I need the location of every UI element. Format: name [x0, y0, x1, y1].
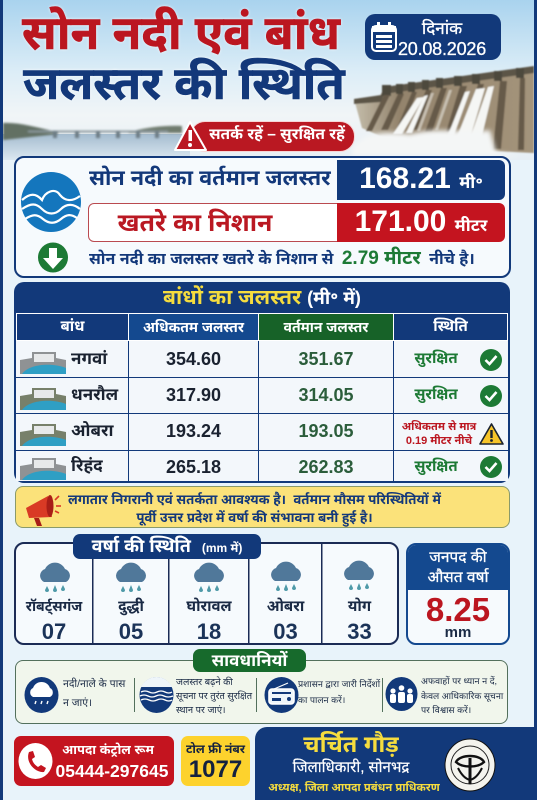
panel: river level [14, 156, 511, 278]
table header: बांध [60, 318, 85, 335]
row: Rihand [20, 456, 502, 480]
officer role: अध्यक्ष, जिला आपदा प्रबंधन प्राधिकरण [268, 782, 440, 794]
table header: अधिकतम जलस्तर [143, 319, 244, 335]
icon: warning [174, 121, 207, 151]
dam name: धनरौल [71, 385, 118, 404]
precaution text [421, 674, 503, 718]
emblem [444, 738, 496, 792]
max level: 354.60 [166, 349, 221, 369]
icon: water [139, 677, 174, 713]
icon: rain cloud [271, 562, 301, 591]
danger label: खतरे का निशान [118, 209, 272, 237]
dam name: रिहंद [71, 456, 103, 475]
rain value: 33 [347, 619, 372, 644]
toll free label: टोल फ्री नंबर [186, 742, 245, 756]
precaution text [176, 675, 252, 717]
rain value: 03 [273, 619, 298, 644]
rain value: 05 [119, 619, 143, 644]
icon: dam [20, 388, 66, 410]
rain value: 18 [197, 619, 221, 644]
precaution text: न जाएं। [63, 697, 92, 709]
icon: calendar [371, 22, 397, 52]
rainfall heading: वर्षा की स्थिति (mm में) [92, 536, 242, 556]
panel: dam levels [14, 282, 510, 483]
header background [3, 0, 534, 160]
average heading [408, 545, 508, 590]
dam name: नगवां [71, 349, 107, 368]
rain: Duddhi [116, 562, 146, 644]
icon: warning [479, 423, 504, 445]
max level: 317.90 [166, 385, 221, 405]
icon: down arrow [38, 242, 68, 272]
icon: dam [20, 424, 66, 446]
icon: check [480, 456, 502, 478]
icon: check [480, 349, 502, 371]
precaution 2 [138, 677, 254, 715]
river note: सोन नदी का जलस्तर खतरे के निशान से 2.79 मीटर नीचे है। [89, 248, 475, 269]
average heading: औसत वर्षा [427, 569, 489, 586]
control room label: आपदा कंट्रोल रूम [62, 742, 154, 757]
status warning text [402, 420, 476, 447]
rain: Ghorawal [186, 562, 232, 644]
row: Nagwan [20, 349, 502, 374]
date text [398, 18, 486, 59]
precaution text [63, 678, 126, 709]
table grid lines [16, 341, 508, 481]
panel: precautions [15, 660, 508, 724]
current level: 351.67 [298, 349, 354, 369]
precaution 4 [385, 677, 507, 715]
river current value: 168.21 मी॰ [359, 162, 483, 195]
rain value: 07 [42, 619, 66, 644]
precaution text: स्थान पर जाएं। [176, 704, 226, 715]
icon: rain cloud [194, 562, 224, 592]
status warning text: अधिकतम से मात्र [402, 421, 476, 433]
icon: phone [18, 743, 53, 779]
row: Obra [20, 420, 504, 447]
precaution text: जलस्तर बढ़ने की [176, 676, 233, 687]
rain: Robertsganj [26, 562, 82, 644]
max level: 265.18 [166, 457, 221, 477]
rain station name: ओबरा [267, 598, 304, 615]
panel: rainfall [14, 542, 399, 645]
icon: megaphone [26, 495, 61, 526]
icon: people [385, 677, 418, 711]
status: सुरक्षित [414, 386, 458, 403]
precaution 1 [24, 677, 126, 713]
toll free number: 1077 [189, 756, 242, 783]
danger value [337, 203, 505, 242]
icon: dam [20, 352, 66, 374]
precaution text: केवल आधिकारिक सूचना [421, 690, 503, 700]
icon: water waves [21, 172, 81, 232]
control room number: 05444-297645 [56, 761, 168, 781]
precaution text: सूचना पर तुरंत सुरक्षित [176, 690, 252, 701]
toll free card [181, 736, 250, 786]
precautions heading [193, 649, 306, 672]
precautions heading: सावधानियों [212, 651, 287, 670]
icon: dam [20, 458, 66, 480]
officer panel [255, 727, 537, 800]
panel: district average rainfall [406, 543, 510, 645]
precaution text: प्रशासन द्वारा जारी निर्देशों [298, 679, 380, 689]
status warning text: 0.19 मीटर नीचे [406, 435, 472, 447]
average unit: mm [445, 624, 471, 641]
precaution text: का पालन करें। [298, 695, 345, 705]
status: सुरक्षित [414, 350, 458, 367]
table header: वर्तमान जलस्तर [284, 319, 368, 335]
status: सुरक्षित [414, 458, 458, 475]
rain station name: रॉबर्ट्सगंज [26, 598, 82, 614]
column dividers [92, 544, 322, 643]
dam photo [353, 65, 534, 155]
rainfall heading [73, 534, 261, 559]
river current label: सोन नदी का वर्तमान जलस्तर [89, 165, 331, 190]
precaution text [298, 676, 380, 708]
precaution text: पर विश्वास करें। [421, 705, 471, 715]
average heading: जनपद की [429, 549, 487, 566]
danger value: 171.00 मीटर [355, 205, 487, 238]
alert ribbon [174, 121, 355, 152]
notice text [68, 492, 442, 527]
icon: rain [24, 677, 58, 713]
date text: 20.08.2026 [398, 39, 486, 59]
icon: rain cloud [344, 560, 374, 590]
date text: दिनांक [422, 19, 462, 38]
control room card [14, 736, 174, 786]
ribbon text: सतर्क रहें – सुरक्षित रहें [209, 126, 345, 143]
precaution text: अफवाहों पर ध्यान न दें, [421, 676, 497, 686]
date badge [365, 14, 501, 60]
rain: Obra [267, 562, 304, 644]
current level: 314.05 [298, 385, 354, 405]
icon: rain cloud [40, 562, 70, 592]
icon: check [480, 385, 502, 407]
current level: 193.05 [298, 421, 354, 441]
danger label [88, 203, 338, 242]
rain: total [344, 560, 374, 644]
table body [16, 341, 508, 481]
rain station name: योग [348, 598, 371, 615]
title: line 1: सोन नदी एवं बांध [22, 6, 340, 59]
officer title: जिलाधिकारी, सोनभद्र [293, 759, 409, 776]
dam name: ओबरा [71, 421, 114, 440]
max level: 193.24 [166, 421, 221, 441]
rain station name: घोरावल [186, 598, 232, 615]
row: Dhanraul [20, 385, 502, 410]
icon: rain cloud [116, 562, 146, 592]
banner: monitoring notice [15, 486, 510, 528]
page side borders [0, 0, 3, 800]
notice text: पूर्वी उत्तर प्रदेश में वर्षा की संभावना बनी हुई है। [136, 510, 373, 525]
table header [16, 313, 508, 341]
title: line 2: जलस्तर की स्थिति [23, 57, 345, 109]
icon: radio [264, 677, 299, 713]
current level: 262.83 [298, 457, 354, 477]
table header: स्थिति [433, 318, 468, 335]
precaution 3 [263, 677, 383, 715]
officer name: चर्चित गौड़ [303, 731, 399, 757]
river current value [337, 160, 505, 200]
precaution dividers [16, 661, 507, 723]
dam heading: बांधों का जलस्तर (मी॰ में) [163, 286, 361, 309]
average value: 8.25 [426, 591, 490, 628]
rain station name: दुद्धी [118, 598, 144, 615]
notice text: लगातार निगरानी एवं सतर्कता आवश्यक है। वर्तमान मौसम परिस्थितियों में [68, 492, 441, 507]
precaution text: नदी/नाले के पास [63, 678, 125, 690]
